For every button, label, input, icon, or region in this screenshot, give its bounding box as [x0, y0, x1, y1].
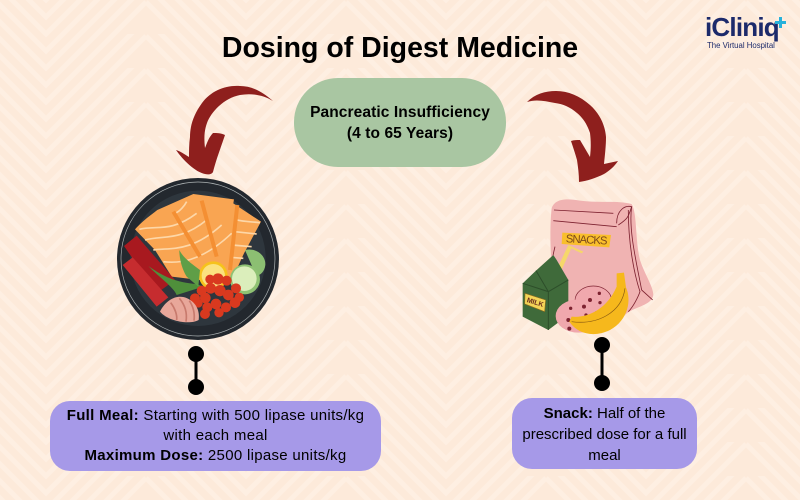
- title: Dosing of Digest Medicine: [222, 32, 578, 64]
- logo: iCliniq: iCliniq: [705, 12, 779, 42]
- full meal text: with each meal: [163, 427, 268, 444]
- oval label: [310, 104, 490, 142]
- full meal text: Full Meal: Starting with 500 lipase units/kg: [67, 407, 364, 424]
- oval label: (4 to 65 Years): [347, 125, 453, 142]
- snack text: [522, 405, 687, 464]
- snack text: meal: [588, 447, 621, 464]
- snack text: Snack: Half of the: [544, 405, 665, 422]
- panel: pancreatic insufficiency oval: [294, 78, 506, 167]
- icon: snacks bag, milk and banana: SNACKS: [566, 233, 608, 248]
- connector: right: [594, 337, 610, 391]
- oval label: Pancreatic Insufficiency: [310, 104, 490, 121]
- full meal text: Maximum Dose: 2500 lipase units/kg: [84, 447, 346, 464]
- connector: left: [188, 346, 204, 395]
- snack text: prescribed dose for a full: [522, 426, 687, 443]
- icon: snacks bag, milk and banana: MILK: [526, 297, 544, 309]
- logo: iCliniq: The Virtual Hospital: [707, 41, 775, 50]
- panel: snack: [512, 398, 697, 469]
- panel: full meal: [50, 401, 381, 471]
- full meal text: [67, 407, 364, 464]
